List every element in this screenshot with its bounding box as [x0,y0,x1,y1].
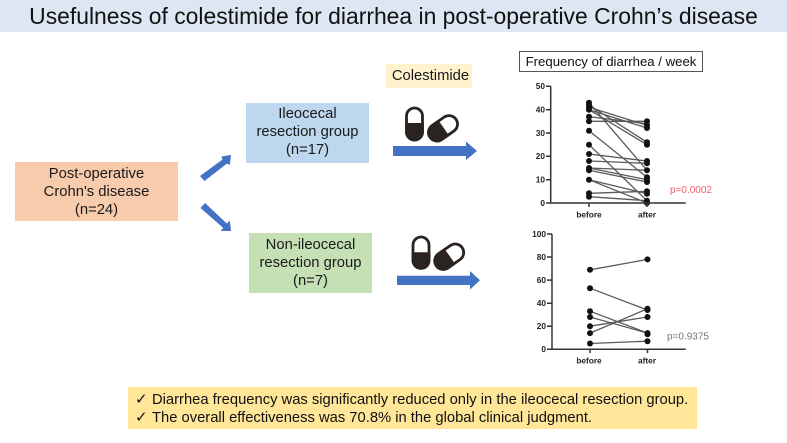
chart: frequency per week, ileocecal group: before [576,210,602,220]
chart title: frequency of diarrhea per week: Frequency of diarrhea / week [526,54,696,69]
box: post-operative Crohn's disease: Crohn's disease [44,184,149,200]
chart: frequency per week, non-ileocecal group: 80 [537,252,546,262]
chart: frequency per week, non-ileocecal group: 40 [537,298,546,308]
chart title: frequency of diarrhea per week [519,51,703,72]
conclusion 1: Diarrhea frequency was significantly reduced only in the ileocecal resection group. [152,392,688,408]
box: non-ileocecal resection group: (n=7) [293,273,328,289]
chart: frequency per week, ileocecal group: 10 [536,174,545,184]
label: Colestimide [386,64,472,88]
chart: frequency per week, non-ileocecal group: before [576,356,602,366]
chart: frequency per week, ileocecal group: 50 [536,81,545,91]
box: ileocecal resection group [246,103,369,163]
box: post-operative Crohn's disease: (n=24) [75,202,118,218]
chart: frequency per week, non-ileocecal group: 20 [537,321,546,331]
box: non-ileocecal resection group: Non-ileocecal [266,237,355,253]
box: post-operative Crohn's disease: Post-operative [49,166,144,182]
box: ileocecal resection group: resection group [256,124,358,140]
chart: frequency per week, ileocecal group: 30 [536,128,545,138]
chart: frequency per week, ileocecal group: after [638,210,657,220]
conclusion 2: The overall effectiveness was 70.8% in the global clinical judgment. [152,410,592,426]
chart: frequency per week, non-ileocecal group: after [638,356,657,366]
conclusion 1: ✓ [135,392,147,408]
box: ileocecal resection group: (n=17) [286,142,329,158]
title: Usefulness of colestimide for diarrhea in post-operative Crohn’s disease [29,3,758,29]
chart: frequency per week, ileocecal group: 0 [540,198,545,208]
chart: frequency per week, non-ileocecal group: 100 [532,229,546,239]
box: ileocecal resection group: Ileocecal [278,106,337,122]
label: Colestimide: Colestimide [392,68,469,84]
chart: frequency per week, non-ileocecal group: 0 [541,344,546,354]
chart: frequency per week, ileocecal group: p=0.0002 [670,185,712,196]
conclusion box [128,387,697,429]
chart: frequency per week, non-ileocecal group: 60 [537,275,546,285]
conclusion 2: ✓ [135,410,147,426]
box: non-ileocecal resection group: resection group [260,255,362,271]
box: post-operative Crohn's disease [15,162,178,221]
chart: frequency per week, non-ileocecal group: p=0.9375 [667,332,709,342]
box: non-ileocecal resection group [249,233,372,293]
chart: frequency per week, ileocecal group: 20 [536,151,545,161]
chart: frequency per week, ileocecal group: 40 [536,104,545,114]
